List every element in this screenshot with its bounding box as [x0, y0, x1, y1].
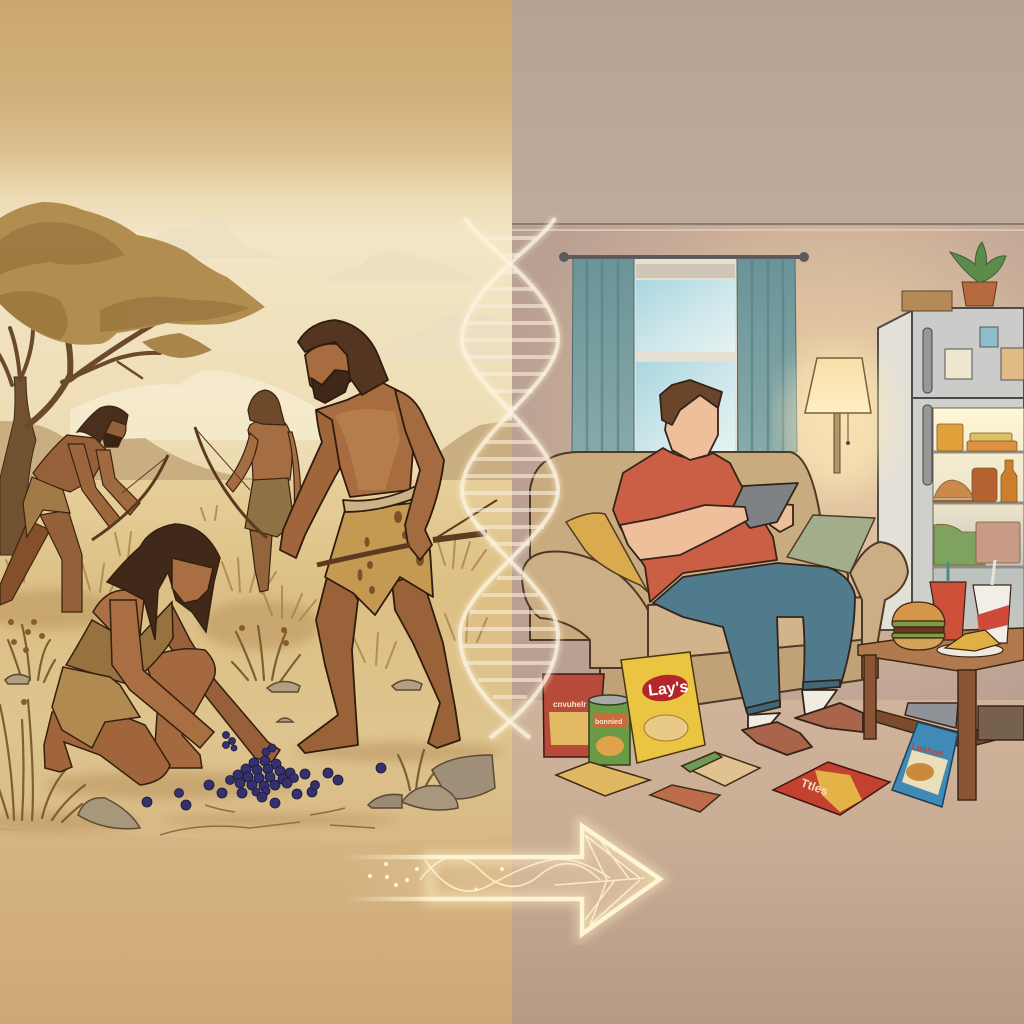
magazines [905, 703, 958, 728]
torso [248, 419, 292, 480]
figure: left hunter bending [0, 406, 168, 612]
green cushion [787, 515, 875, 573]
arrows [317, 500, 497, 565]
hide skirt [245, 478, 294, 537]
seated man [613, 380, 863, 755]
skirt spots [358, 511, 424, 594]
face [305, 344, 352, 400]
sofa right arm [850, 542, 908, 678]
far arm [165, 605, 280, 762]
white cup [973, 585, 1011, 643]
tablet [733, 483, 798, 528]
clouds [70, 370, 320, 440]
plant leaves [950, 242, 1006, 282]
snack: Lay's chip bag: Lay's [647, 679, 689, 700]
helix glow [460, 218, 558, 738]
arrow sparkles [368, 862, 504, 890]
branches [0, 326, 162, 426]
table shelf [876, 710, 1024, 746]
dry grass [6, 506, 487, 668]
sofa back [530, 452, 848, 640]
acacia tree [0, 202, 265, 555]
burger, fries and drinks [892, 560, 1011, 657]
figure: kneeling gatherer [44, 524, 280, 785]
fridge lower door [912, 398, 1024, 633]
socks [748, 690, 837, 733]
snack: green can: bonnied [595, 719, 622, 726]
near arm [110, 600, 214, 748]
plate [937, 643, 1003, 657]
fridge food [934, 424, 1020, 565]
canopy shading [0, 222, 250, 340]
shirt [613, 448, 777, 602]
arms [68, 444, 120, 528]
arms [226, 433, 258, 492]
face [665, 395, 718, 460]
ground cracks [160, 805, 375, 835]
storage box [902, 291, 952, 311]
helix strands [460, 218, 558, 738]
floor lamp [783, 350, 893, 490]
torso [316, 383, 420, 497]
hide skirt [23, 477, 70, 537]
panel: modern living room [512, 0, 1024, 1024]
left leg [298, 577, 358, 753]
arrow inner helix lines [420, 835, 645, 925]
chest highlight [335, 409, 400, 490]
fridge interior [933, 408, 1024, 630]
right leg [392, 573, 460, 748]
snack: blue packet: Lushon [911, 741, 944, 759]
face [172, 558, 213, 603]
lower leg [44, 705, 170, 785]
arrow fill [345, 826, 660, 934]
beard [311, 370, 352, 403]
distant hills [0, 420, 512, 485]
sofa [522, 452, 908, 704]
bow [195, 427, 267, 538]
shoulders [93, 590, 145, 635]
hair [660, 380, 722, 425]
curtains and rod [559, 252, 809, 452]
plant pot [962, 282, 997, 306]
snack: red chip bag [543, 674, 604, 757]
front leg [40, 510, 82, 612]
left arm [280, 410, 340, 558]
wall [512, 226, 1024, 716]
DNA helix [460, 218, 558, 738]
fridge notes [945, 327, 1024, 380]
small canopy [142, 333, 212, 358]
glowing arrow [345, 826, 660, 934]
ground shadows [0, 590, 505, 832]
blueberries [142, 732, 386, 810]
fridge side [878, 308, 917, 630]
table top [858, 628, 1024, 672]
snack: small flat packets [556, 752, 760, 812]
hair [77, 406, 128, 442]
savanna sky [0, 0, 512, 500]
head [106, 420, 127, 440]
red cup [930, 582, 966, 640]
trunk [0, 377, 36, 555]
snack: blue packet [892, 722, 958, 807]
fur belt [343, 486, 418, 512]
raised leg [145, 649, 215, 768]
dress [66, 602, 173, 685]
arrow glow [430, 826, 660, 934]
snack: red pillow bag: Ttles [799, 776, 830, 799]
far hand [770, 503, 793, 532]
snack: red pillow bag [773, 762, 890, 815]
bow [92, 455, 168, 540]
right arm [395, 390, 444, 560]
snack: green can [589, 695, 630, 765]
trousers [653, 563, 855, 713]
side table [858, 628, 1024, 800]
sofa seat [648, 597, 870, 660]
trouser cuffs [746, 680, 840, 715]
ceiling [512, 0, 1024, 226]
flower seed heads [8, 619, 289, 705]
sofa base [600, 640, 875, 704]
items on fridge [902, 242, 1006, 311]
main canopy [0, 202, 265, 345]
snack: Lay's chip bag [621, 652, 705, 763]
floor [512, 700, 1024, 1024]
rocks [5, 674, 495, 829]
refrigerator [878, 308, 1024, 633]
figure: hunter from behind [195, 390, 301, 592]
fries [945, 630, 1000, 651]
fridge upper door [912, 308, 1024, 398]
arrow outline [345, 826, 660, 934]
hair [298, 320, 388, 395]
table legs [864, 655, 876, 739]
yellow cushion [566, 513, 648, 592]
hair [107, 524, 220, 640]
window [632, 258, 738, 454]
ground [0, 480, 512, 841]
near arm [620, 505, 748, 560]
torso [33, 435, 108, 492]
figure: standing hunter [280, 320, 497, 753]
hide skirt [325, 503, 433, 615]
slippers [742, 722, 812, 755]
snack: red chip bag: cnvuhelr [553, 700, 586, 709]
rear leg [0, 520, 50, 605]
legs [250, 530, 272, 592]
helix rungs [462, 238, 558, 697]
hide skirt [52, 667, 140, 748]
head and hair [248, 390, 285, 425]
sofa left arm [522, 551, 648, 668]
bottom backdrop [0, 830, 512, 938]
beard [102, 432, 122, 447]
burger [892, 602, 945, 622]
panel: prehistoric savanna [0, 0, 512, 1024]
